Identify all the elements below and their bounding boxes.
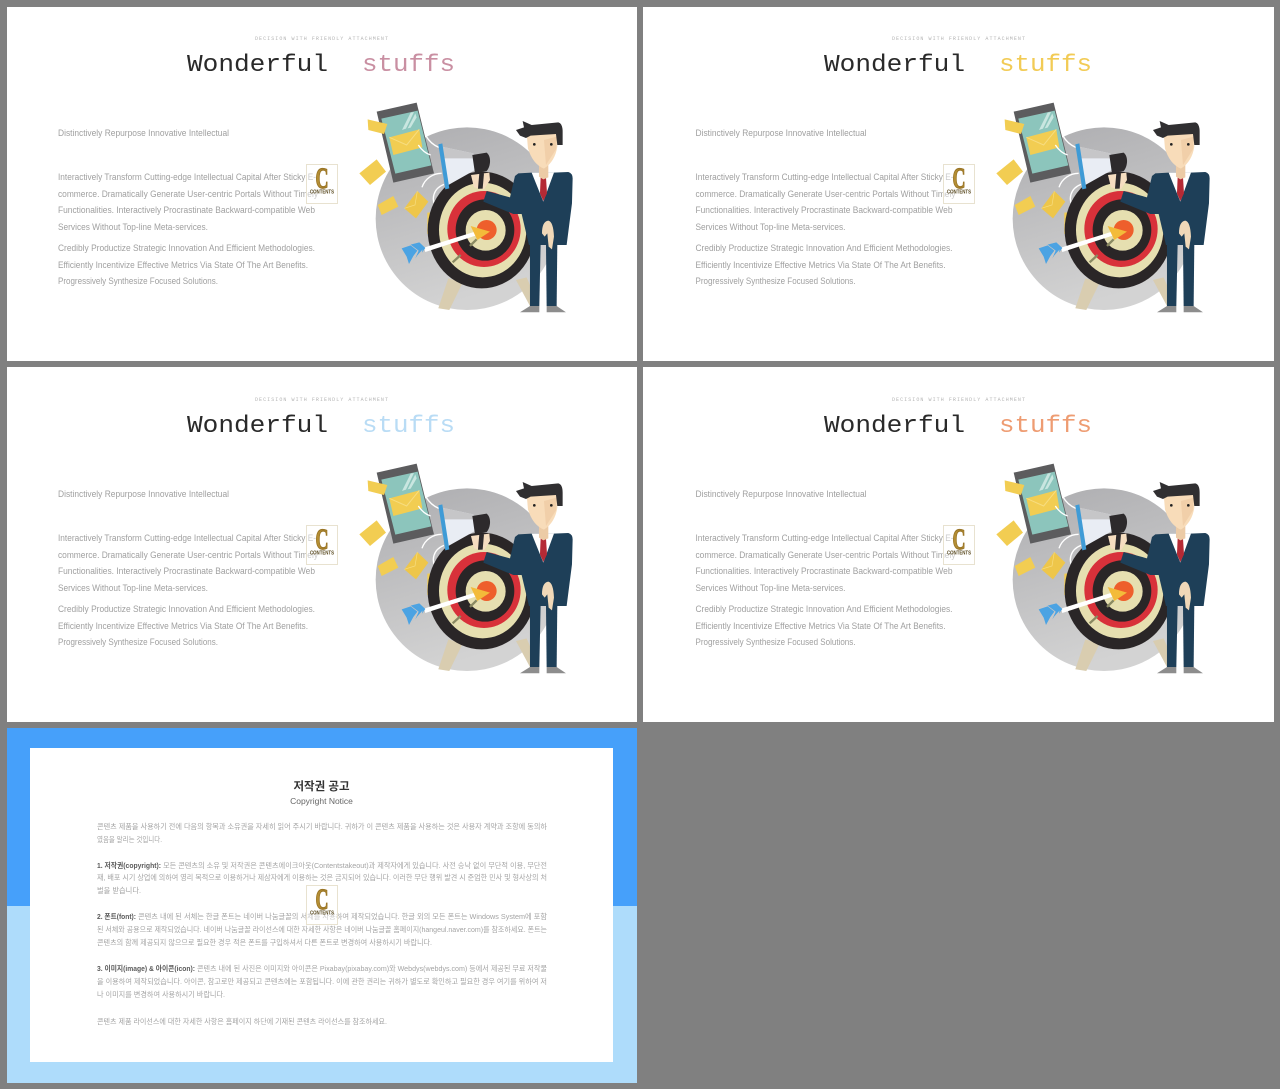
title: Wonderful <box>824 52 965 79</box>
notice heading: 저작권 공고 <box>293 779 350 793</box>
notice section 1: 모든 콘텐츠의 소유 및 저작권은 콘텐츠에이크아웃(Contentstakeout)과 제작자에게 있습니다. 사전 승낙 없이 무단적 이용, 무단전 <box>163 861 547 870</box>
phone <box>377 103 434 183</box>
body text: Services Without Top-line Meta-services. <box>58 222 208 232</box>
watermark: CONTENTS <box>947 190 972 196</box>
body text: Services Without Top-line Meta-services. <box>58 583 208 593</box>
body text <box>58 172 318 286</box>
body text: Interactively Transform Cutting-edge Intellectual Capital After Sticky E- <box>58 533 316 543</box>
notice section 2: 2. 폰트(font): <box>97 912 136 921</box>
title: stuffs <box>999 413 1092 440</box>
title: Wonderful <box>187 413 328 440</box>
body text: Credibly Productize Strategic Innovation And Efficient Methodologies. <box>58 604 315 614</box>
notice section 1: 1. 저작권(copyright): <box>97 861 161 870</box>
notice section 3: 나 이미지를 변경하여 사용하시기 바랍니다. <box>97 990 225 999</box>
businessman <box>471 121 573 312</box>
body text: Progressively Synthesize Focused Solutions. <box>58 276 218 286</box>
notice footer: 콘텐츠 제품 라이선스에 대한 자세한 사항은 홈페이지 하단에 기재된 콘텐츠 라이선스를 참조하세요. <box>97 1017 387 1026</box>
body text: commerce. Dramatically Generate User-centric Portals Without Timely <box>696 550 956 560</box>
notice intro <box>97 822 547 844</box>
caption: DECISION WITH FRIENDLY ATTACHMENT <box>892 397 1025 403</box>
panel: slide 4 orange <box>643 367 1274 722</box>
panel: copyright notice <box>7 728 637 1083</box>
illustration: man with target <box>359 103 573 312</box>
body text: Credibly Productize Strategic Innovation And Efficient Methodologies. <box>58 243 315 253</box>
watermark: CONTENTS <box>310 550 335 556</box>
watermark <box>306 523 338 564</box>
watermark <box>944 523 974 564</box>
megaphone <box>438 143 490 189</box>
notice section 1: 재, 배포 시기 상업에 의하여 영리 목적으로 이용하거나 제삼자에게 이용하는 것은 금지되어 있습니다. 이러한 무단 행위 발견 시 준엄한 민사 및 형사상의 처 <box>97 873 547 882</box>
notice section 2: 콘텐츠 내에 된 서체는 한글 폰트는 네이버 나눔글꼴의 서체를 사용하여 제작되었습니다. 한글 외의 모든 폰트는 Windows System에 포함 <box>138 912 547 921</box>
subheading: Distinctively Repurpose Innovative Intellectual <box>58 489 229 499</box>
body text <box>696 533 956 647</box>
title: Wonderful <box>824 413 965 440</box>
notice section 2: 된 서체와 공용으로 제작되었습니다. 네이버 나눔글꼴 라이선스에 대한 자세한 사항은 네이버 나눔글꼴 홈페이지(hangeul.naver.com)를 참조하세요. 폰트는 <box>97 925 547 934</box>
body text: Progressively Synthesize Focused Solutions. <box>58 637 218 647</box>
watermark: CONTENTS <box>947 550 972 556</box>
watermark <box>944 162 974 204</box>
body text: Functionalities. Interactively Procrastinate Backward-compatible Web <box>696 566 952 576</box>
panel: slide 3 blue <box>7 367 637 722</box>
target stand <box>438 277 539 310</box>
subheading: Distinctively Repurpose Innovative Intellectual <box>696 128 867 138</box>
watermark <box>306 883 338 924</box>
body text: Functionalities. Interactively Procrastinate Backward-compatible Web <box>696 205 952 215</box>
notice section 3: 콘텐츠 내에 된 사진은 이미지와 아이콘은 Pixabay(pixabay.com)와 Webdys(webdys.com) 등에서 제공된 무료 저작물 <box>197 964 547 973</box>
grey circle <box>376 127 558 310</box>
notice section 1: 벌을 받습니다. <box>97 886 141 895</box>
illustration: man with target <box>996 464 1210 673</box>
body text: Credibly Productize Strategic Innovation And Efficient Methodologies. <box>696 243 952 253</box>
caption: DECISION WITH FRIENDLY ATTACHMENT <box>255 36 388 42</box>
notice intro: 콘텐츠 제품을 사용하기 전에 다음의 항목과 소유권을 자세히 읽어 주시기 바랍니다. 귀하가 이 콘텐츠 제품을 사용하는 것은 사용자 계약과 조항에 동의하 <box>97 822 547 831</box>
illustration: man with target <box>359 464 573 673</box>
notice section 3: 3. 이미지(image) & 아이콘(icon): <box>97 964 195 973</box>
title: stuffs <box>362 413 455 440</box>
body text <box>58 533 318 647</box>
body text <box>696 172 956 286</box>
title: stuffs <box>362 52 455 79</box>
body text: commerce. Dramatically Generate User-centric Portals Without Timely <box>696 189 956 199</box>
arrow <box>402 226 490 264</box>
title <box>187 413 455 440</box>
body text: Progressively Synthesize Focused Solutions. <box>696 637 856 647</box>
body text: Efficiently Incentivize Effective Metrics Via State Of The Art Benefits. <box>58 621 308 631</box>
body text: Interactively Transform Cutting-edge Intellectual Capital After Sticky E- <box>696 533 954 543</box>
body text: Functionalities. Interactively Procrastinate Backward-compatible Web <box>58 205 315 215</box>
target <box>428 172 536 288</box>
notice section 2 <box>97 912 547 947</box>
body text: Progressively Synthesize Focused Solutions. <box>696 276 856 286</box>
watermark: C <box>316 883 328 916</box>
watermark: C <box>316 162 328 195</box>
panel: slide 2 yellow <box>643 7 1274 361</box>
title <box>824 52 1092 79</box>
caption: DECISION WITH FRIENDLY ATTACHMENT <box>892 36 1025 42</box>
body text: Efficiently Incentivize Effective Metrics Via State Of The Art Benefits. <box>696 621 946 631</box>
title: Wonderful <box>187 52 328 79</box>
title <box>187 52 455 79</box>
watermark: CONTENTS <box>310 190 335 196</box>
caption: DECISION WITH FRIENDLY ATTACHMENT <box>255 397 388 403</box>
notice section 3: 을 이용하여 제작되었습니다. 아이콘, 참고로만 제공되고 콘텐츠에는 포함됩니다. 이에 관한 권리는 귀하가 별도로 확인하고 필요한 경우 여기를 위하여 저 <box>97 977 547 986</box>
body text: Services Without Top-line Meta-services. <box>696 222 846 232</box>
notice subheading: Copyright Notice <box>290 796 353 806</box>
body text: Efficiently Incentivize Effective Metrics Via State Of The Art Benefits. <box>58 260 308 270</box>
notice intro: 였음을 알리는 것입니다. <box>97 835 162 844</box>
body text: Credibly Productize Strategic Innovation And Efficient Methodologies. <box>696 604 952 614</box>
body text: Efficiently Incentivize Effective Metrics Via State Of The Art Benefits. <box>696 260 946 270</box>
watermark: C <box>952 523 966 556</box>
watermark: C <box>316 523 328 556</box>
body text: Functionalities. Interactively Procrastinate Backward-compatible Web <box>58 566 315 576</box>
body text: commerce. Dramatically Generate User-centric Portals Without Timely <box>58 189 318 199</box>
subheading: Distinctively Repurpose Innovative Intellectual <box>58 128 229 138</box>
watermark: CONTENTS <box>310 910 335 916</box>
panel: slide 1 pink <box>7 7 637 361</box>
envelopes <box>359 119 441 234</box>
notice section 2: 콘텐츠의 함께 제공되지 않으므로 필요한 경우 적은 폰트를 구입하셔서 다른 폰트로 변경하여 사용하시기 바랍니다. <box>97 938 432 947</box>
connector lines <box>418 136 444 208</box>
subheading: Distinctively Repurpose Innovative Intellectual <box>696 489 867 499</box>
notice section 3 <box>97 964 547 999</box>
body text: Interactively Transform Cutting-edge Intellectual Capital After Sticky E- <box>58 172 316 182</box>
title <box>824 413 1092 440</box>
body text: commerce. Dramatically Generate User-centric Portals Without Timely <box>58 550 318 560</box>
watermark <box>306 162 338 204</box>
title: stuffs <box>999 52 1092 79</box>
body text: Services Without Top-line Meta-services. <box>696 583 846 593</box>
body text: Interactively Transform Cutting-edge Intellectual Capital After Sticky E- <box>696 172 954 182</box>
watermark: C <box>952 162 966 195</box>
illustration: man with target <box>996 103 1210 312</box>
notice section 1 <box>97 861 547 895</box>
